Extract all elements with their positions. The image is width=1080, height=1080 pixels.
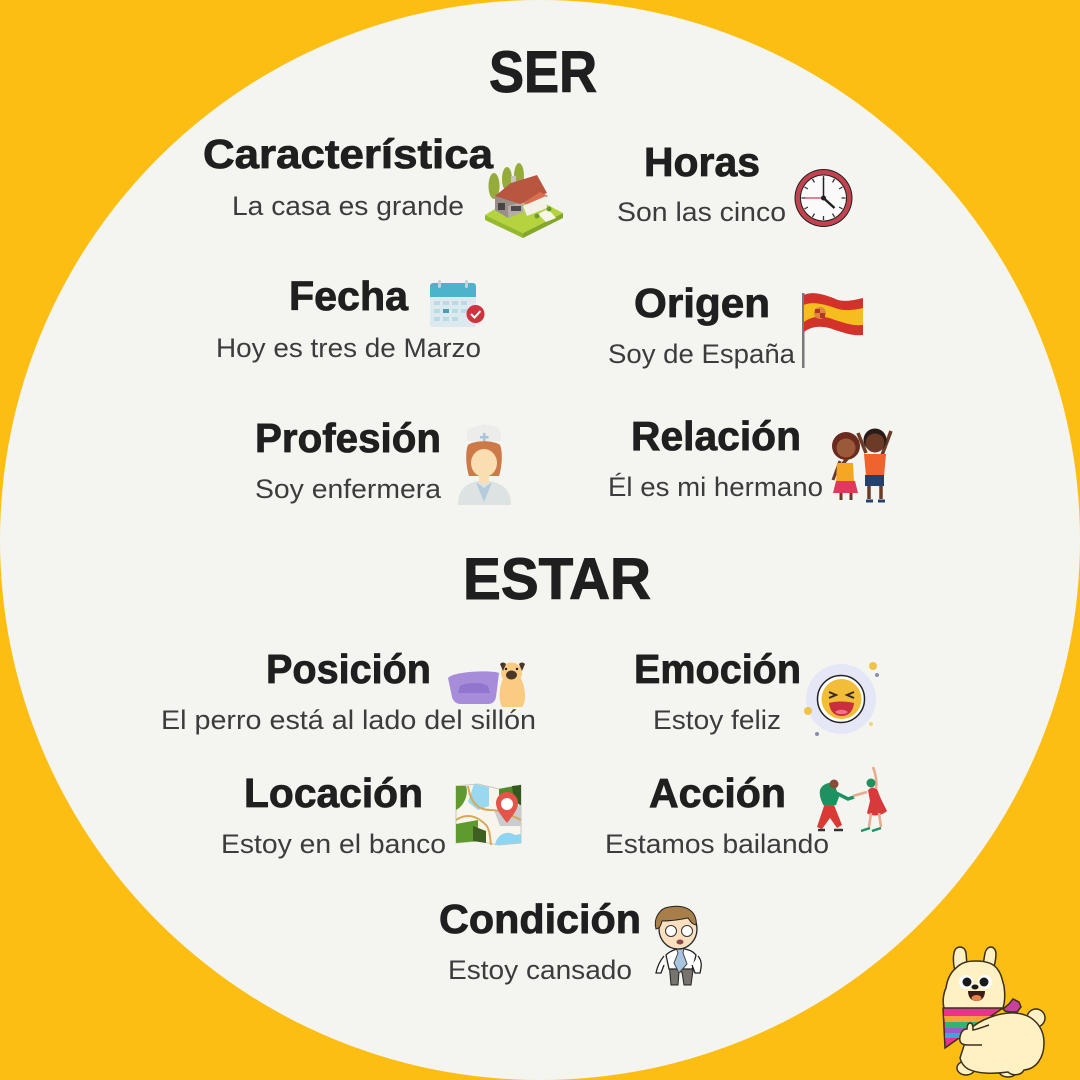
item: Horas: Horas (644, 139, 760, 185)
icon: calendar (430, 280, 484, 327)
item: Locación: Locación (244, 770, 423, 816)
icon: map (456, 784, 521, 845)
item: Acción (605, 770, 829, 859)
item: Profesión: Soy enfermera (255, 474, 442, 504)
title: ESTAR: ESTAR (463, 547, 651, 612)
icon: clock (794, 169, 852, 227)
item: Horas (617, 139, 786, 227)
item: Fecha (216, 273, 481, 363)
item: Condición (439, 896, 641, 985)
item: Condición: Condición (439, 896, 641, 942)
item: Posición: Posición (266, 646, 431, 692)
icon: dancing couple (817, 767, 887, 831)
item: Característica: La casa es grande (232, 191, 464, 221)
item: Condición: Estoy cansado (448, 955, 632, 985)
item: Origen (608, 280, 796, 369)
item: Fecha: Hoy es tres de Marzo (216, 333, 481, 363)
icon: tired man (655, 906, 701, 985)
item: Emoción (634, 646, 801, 735)
item: Profesión: Profesión (255, 415, 441, 461)
item: Emoción: Estoy feliz (653, 705, 781, 735)
title: SER: SER (489, 40, 597, 105)
item: Relación (608, 413, 823, 502)
item: Acción: Acción (649, 770, 786, 816)
item: Locación: Estoy en el banco (221, 829, 446, 859)
item: Relación: Relación (631, 413, 801, 459)
item: Acción: Estamos bailando (605, 829, 829, 859)
icon: sofa and dog (448, 662, 525, 707)
icon: nurse (458, 424, 511, 505)
icon: children (832, 428, 891, 501)
item: Emoción: Emoción (634, 646, 801, 692)
item: Profesión (255, 415, 442, 504)
item: Relación: Él es mi hermano (608, 472, 823, 502)
llama face (959, 975, 992, 1001)
icon: llama mascot (943, 947, 1045, 1077)
item: Característica (203, 131, 494, 221)
item: Fecha: Fecha (289, 273, 409, 319)
item: Horas: Son las cinco (617, 197, 786, 227)
item: Posición (161, 646, 536, 735)
item: Locación (221, 770, 446, 859)
item: Característica: Característica (203, 131, 494, 177)
item: Origen: Soy de España (608, 339, 796, 369)
icon: laughing emoji (804, 662, 879, 736)
icon: Spanish flag (802, 293, 863, 368)
item: Origen: Origen (634, 280, 770, 326)
item: Posición: El perro está al lado del sillón (161, 705, 536, 735)
icon: house (485, 163, 563, 238)
